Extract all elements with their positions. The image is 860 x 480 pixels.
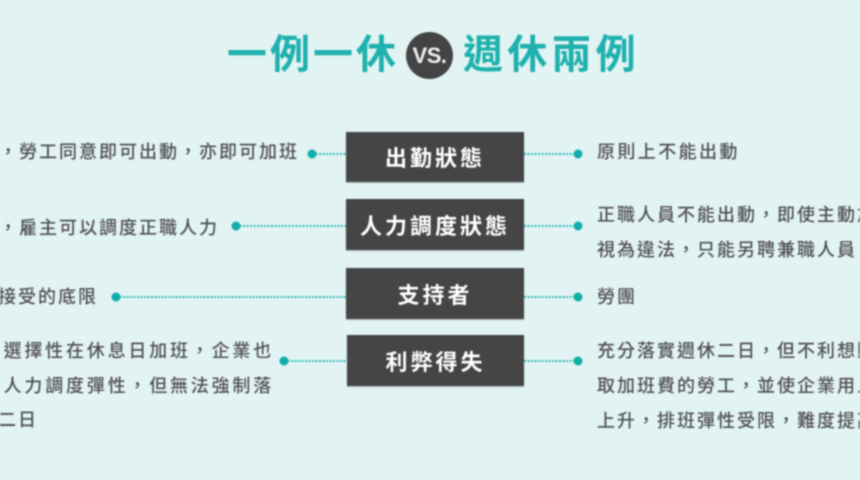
title: right term: 週休兩例 [463, 33, 640, 77]
row label: attendance status: 出勤狀態 [385, 146, 485, 171]
row label: supporters [346, 268, 524, 319]
right text: staffing: 視為違法，只能另聘兼職人員 [597, 240, 857, 260]
row label: pros and cons [347, 335, 524, 386]
right text: supporters: 勞團 [597, 287, 637, 307]
title [227, 31, 640, 80]
left text: pros and cons [0, 340, 274, 430]
icon: vs badge [406, 32, 453, 79]
title: left term: 一例一休 [227, 33, 399, 77]
right text: pros and cons [596, 340, 860, 431]
row label: staffing status: 人力調度狀態 [360, 214, 510, 238]
row label: supporters: 支持者 [397, 282, 472, 308]
row label: pros and cons: 利弊得失 [385, 350, 486, 374]
right text: staffing [596, 204, 860, 260]
icon: vs badge: VS. [413, 43, 446, 68]
row label: staffing status [346, 199, 524, 250]
right text: attendance: 原則上不能出動 [597, 142, 740, 162]
row label: attendance status [346, 132, 524, 182]
